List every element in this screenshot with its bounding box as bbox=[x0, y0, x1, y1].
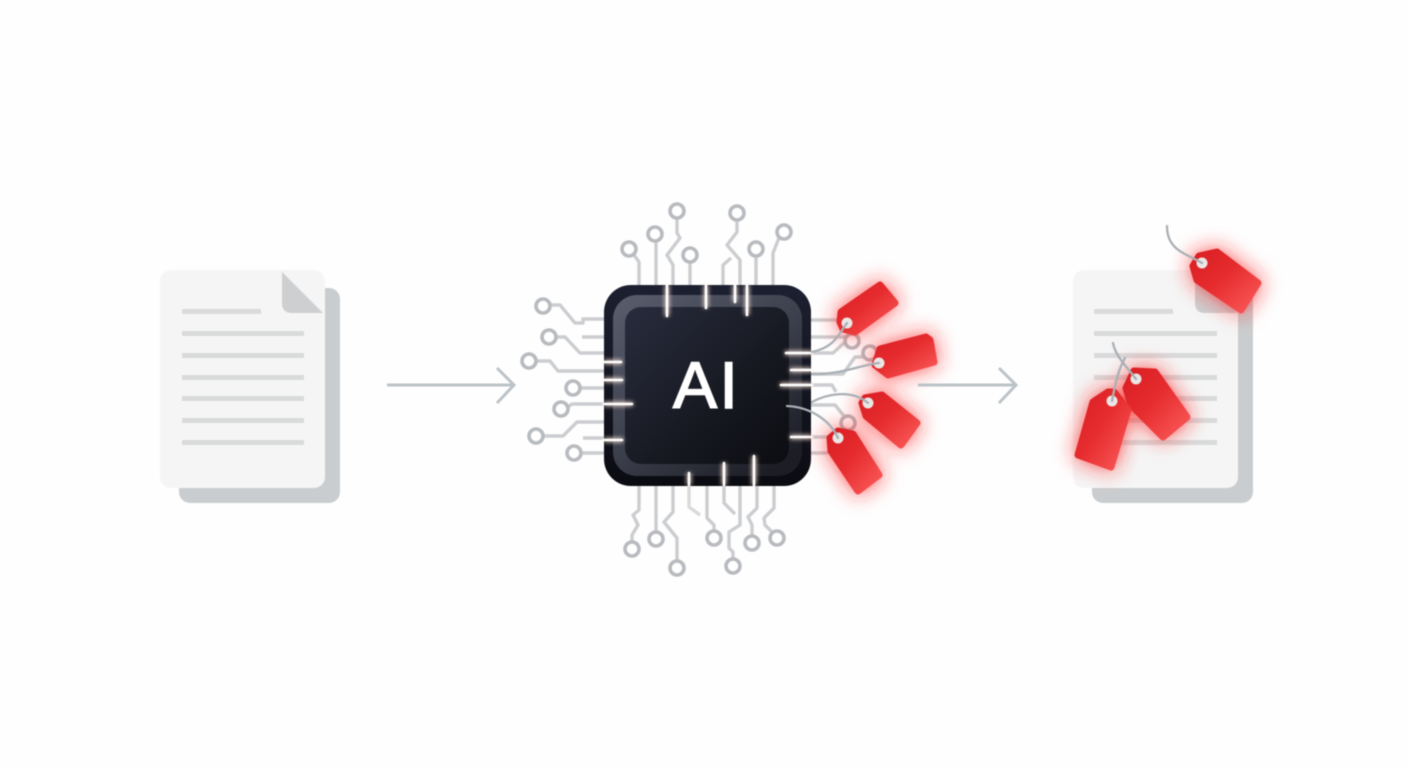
tag 2 bbox=[874, 337, 934, 375]
chip face bbox=[625, 307, 789, 464]
tag: top right bbox=[1167, 226, 1258, 310]
traces: bottom bbox=[625, 485, 784, 575]
document: source bbox=[160, 270, 340, 503]
tag strings bbox=[787, 323, 879, 438]
red tags emitted by chip bbox=[787, 285, 934, 491]
tag: middle bbox=[1113, 343, 1187, 437]
arrow: document to chip bbox=[387, 368, 514, 403]
arrow: chip to tagged document bbox=[918, 368, 1016, 403]
front sheet bbox=[1073, 270, 1238, 488]
tag 1 bbox=[840, 285, 895, 332]
tag 4 bbox=[830, 431, 879, 491]
folded corner bbox=[282, 272, 323, 313]
tag glows bbox=[1078, 252, 1258, 467]
AI chip bbox=[604, 285, 811, 486]
traces: left bbox=[522, 299, 604, 460]
back sheet bbox=[179, 288, 340, 503]
tag glows bbox=[830, 285, 934, 491]
text lines bbox=[182, 309, 304, 445]
folded corner bbox=[1195, 272, 1238, 313]
chip label: AI bbox=[673, 348, 740, 422]
traces: right bbox=[810, 320, 877, 453]
back sheet bbox=[1092, 288, 1253, 503]
glowing chip pins bbox=[604, 285, 812, 485]
tag: lower left bbox=[1078, 358, 1128, 467]
chip body bbox=[604, 285, 811, 486]
text lines bbox=[1094, 309, 1217, 445]
front sheet bbox=[160, 270, 325, 488]
document: tagged output bbox=[1073, 226, 1258, 503]
chip bezel bbox=[613, 295, 802, 476]
tag 3 bbox=[862, 395, 917, 445]
traces: top bbox=[622, 204, 791, 286]
circuit traces bbox=[522, 204, 877, 575]
